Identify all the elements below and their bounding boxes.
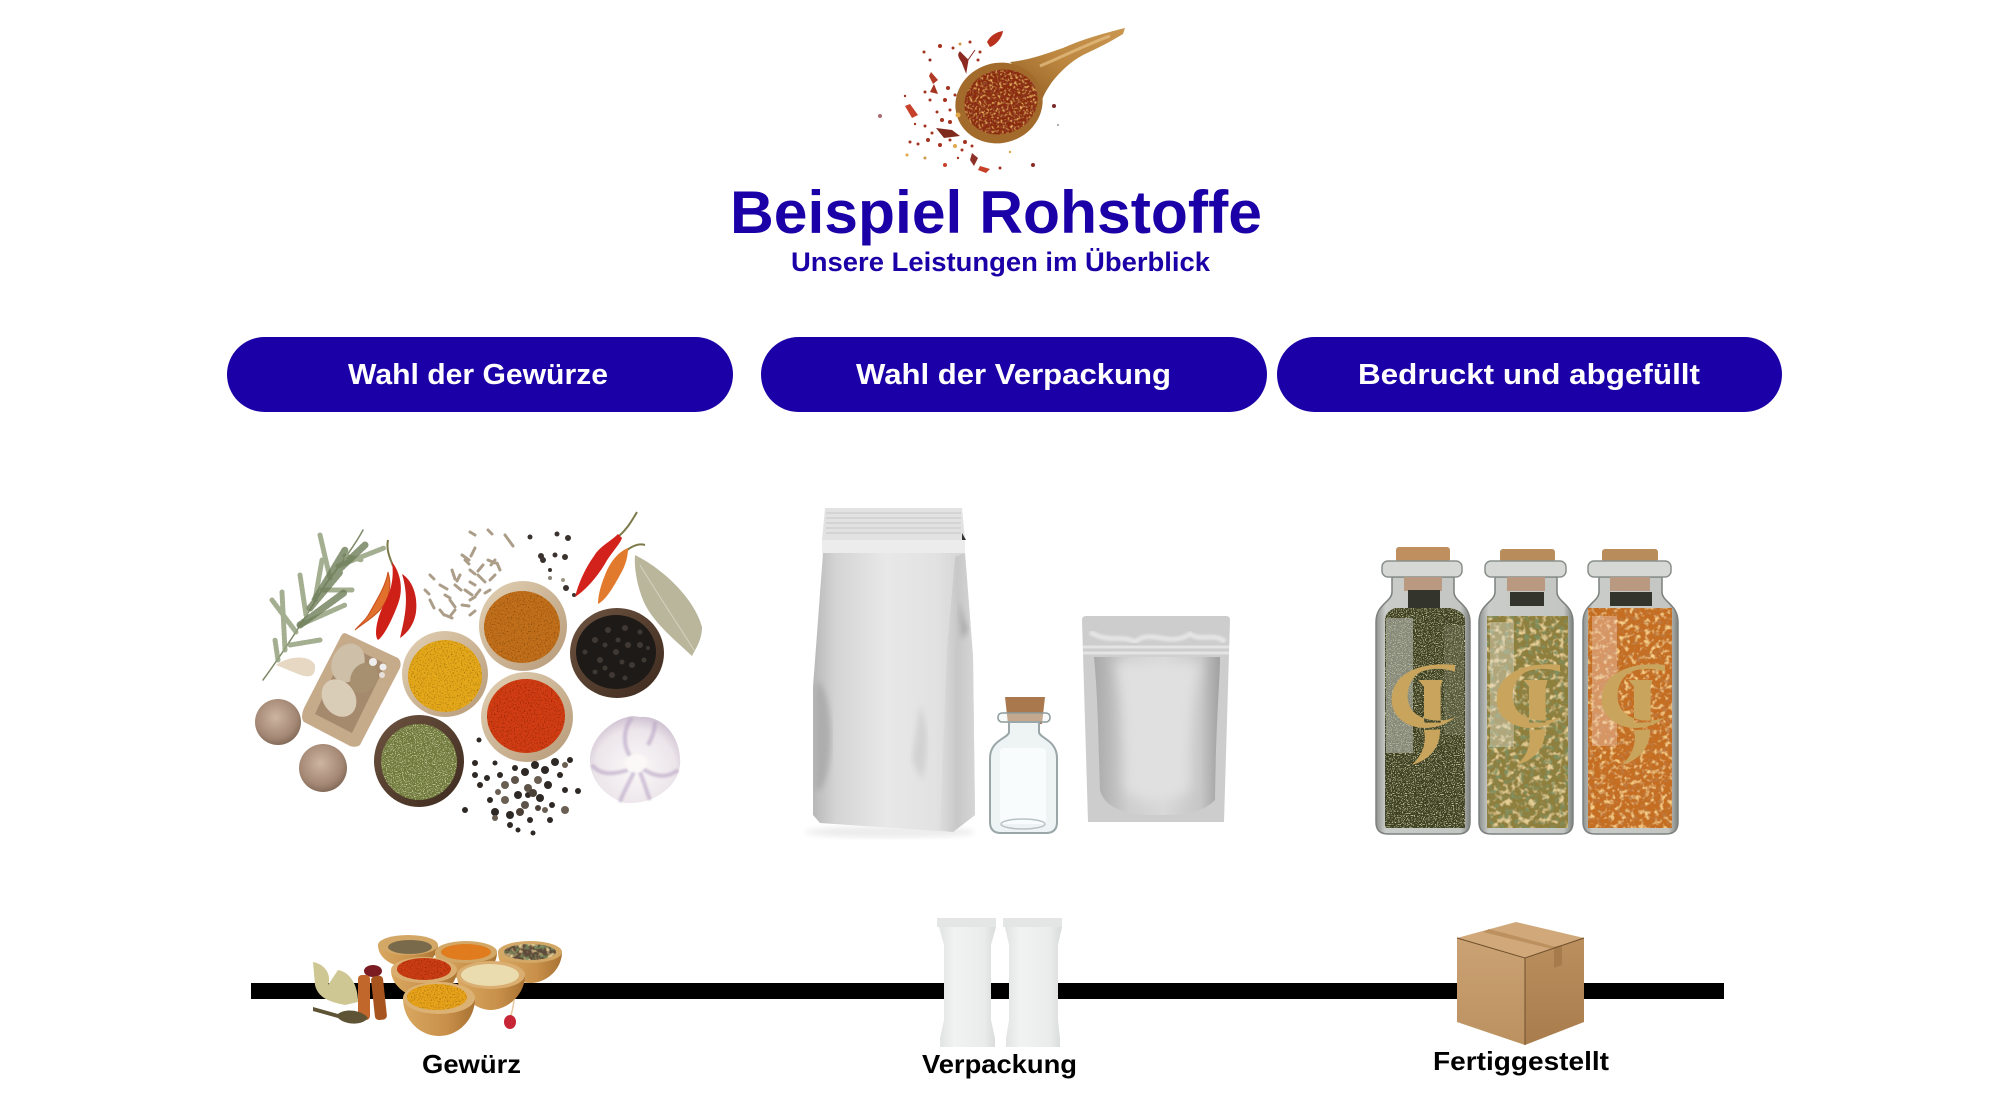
glass bottle with cork [990, 697, 1057, 833]
gold logo [1497, 664, 1561, 765]
button: Wahl der Verpackung [761, 337, 1267, 412]
bay leaves [313, 962, 358, 1005]
bowl: orange spice [479, 581, 567, 671]
button: Wahl der Gewürze [227, 337, 733, 412]
sachet 2 [1003, 918, 1062, 1047]
bowl: white seeds [457, 961, 525, 1010]
garlic clove [276, 658, 315, 676]
herb sprig [263, 530, 384, 680]
dried chili [364, 965, 382, 977]
label: Verpackung: Verpackung [922, 1049, 1077, 1079]
image: filled spice jars with gold logo [1376, 547, 1678, 834]
button: Bedruckt und abgefüllt: Bedruckt und abgefüllt [1358, 359, 1700, 391]
gold logo [1602, 664, 1666, 765]
label: Gewürz: Gewürz [422, 1049, 521, 1079]
bowl: paprika [481, 672, 573, 762]
orange chili [598, 544, 645, 604]
bowl: red spice [391, 957, 457, 998]
whole nutmegs [255, 699, 347, 792]
spoon bowl [945, 51, 1053, 155]
image: packaging [805, 508, 1230, 838]
seed spoon [313, 1007, 368, 1024]
icon: wooden spoon with chili flakes [878, 28, 1125, 173]
jar 2: mixed herbs [1479, 549, 1573, 834]
button: Bedruckt und abgefüllt [1277, 337, 1782, 412]
cumin seeds [425, 530, 513, 618]
subtitle: Unsere Leistungen im Überblick [791, 247, 1211, 277]
chili flakes in spoon [956, 60, 1046, 144]
label: Fertiggestellt: Fertiggestellt [1433, 1046, 1609, 1076]
spoon handle [1010, 28, 1125, 100]
icon: white sachets [937, 918, 1062, 1047]
button: Wahl der Gewürze: Wahl der Gewürze [348, 359, 608, 391]
chili berry [504, 1000, 516, 1029]
bowl: black pepper [570, 608, 664, 698]
garlic bulb [590, 716, 680, 803]
red chili [376, 540, 416, 640]
small chili [355, 572, 390, 630]
scattered flakes [878, 31, 1059, 173]
cinnamon sticks [358, 975, 387, 1020]
button: Wahl der Verpackung: Wahl der Verpackung [856, 359, 1171, 391]
jar 1: dark green herb [1376, 547, 1470, 834]
mixed peppercorns [462, 738, 581, 836]
gold logo [1392, 664, 1456, 765]
scattered peppercorns [528, 532, 576, 597]
jar 3: orange spice [1583, 549, 1678, 834]
icon: cardboard box [1457, 922, 1584, 1045]
silver pouch [1082, 616, 1230, 822]
bowl: mixed pepper [498, 941, 562, 983]
bowl: green herbs [374, 715, 464, 807]
sachet 1 [937, 918, 996, 1047]
red chili right [575, 512, 637, 597]
title: Beispiel Rohstoffe [730, 179, 1262, 246]
wooden tray [302, 633, 401, 747]
bowl: ground pepper [378, 935, 438, 967]
bowl: turmeric [402, 631, 488, 717]
nutmeg seeds in tray [314, 638, 386, 724]
bowl: chopped orange [435, 941, 497, 979]
image: assorted spices [255, 512, 702, 836]
timeline bar [251, 983, 1724, 999]
icon: spice bowls [313, 935, 562, 1036]
bay leaf [635, 555, 702, 656]
bowl: turmeric [403, 982, 475, 1036]
large silver bag [805, 508, 975, 838]
